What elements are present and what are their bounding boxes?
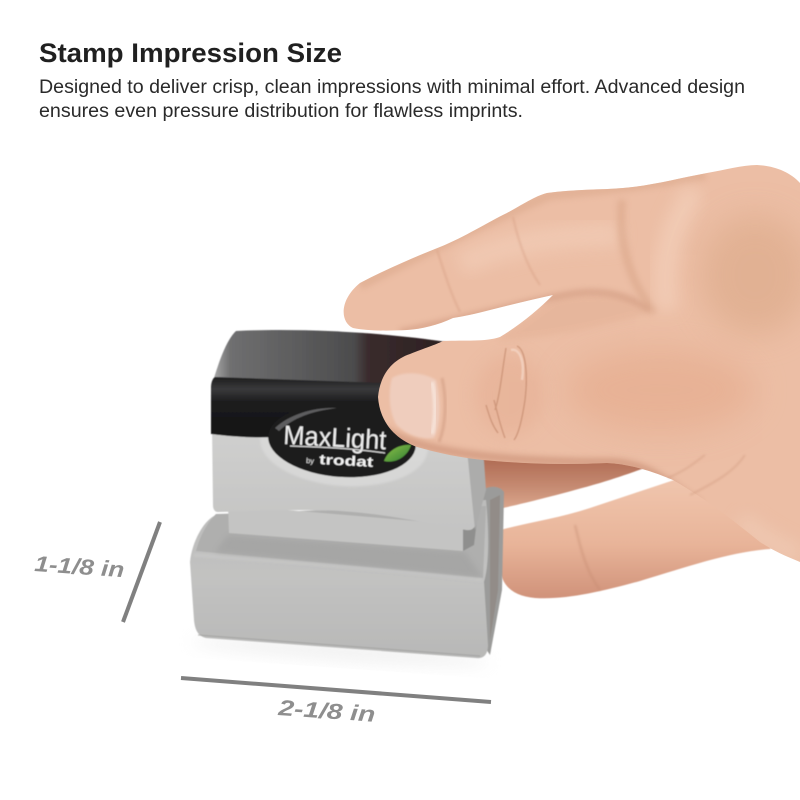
pinky finger <box>500 478 790 598</box>
base side face <box>480 487 504 655</box>
tan back of hand <box>700 215 800 335</box>
index finger highlight <box>460 235 620 265</box>
warm thumb knuckle area <box>565 348 755 432</box>
description text: ensures even pressure distribution for flawless imprints. <box>39 101 523 122</box>
side reflection <box>490 495 500 640</box>
description text: Designed to deliver crisp, clean impressions with minimal effort. Advanced design <box>39 77 745 98</box>
width dimension line <box>181 678 491 702</box>
black band <box>211 377 440 437</box>
right grip side <box>467 450 486 530</box>
wordmark swoosh <box>290 446 385 453</box>
stamp <box>190 330 504 658</box>
width label: 2-1/8 in <box>276 695 376 727</box>
index upper shading <box>360 175 705 285</box>
thumb knuckle highlight <box>511 350 523 380</box>
stamp floor shadow <box>190 634 490 670</box>
title: Stamp Impression Size <box>39 38 342 68</box>
upper grip body <box>212 425 476 530</box>
hand silhouette <box>344 165 800 562</box>
hand: fingers behind the stamp <box>470 450 790 598</box>
height dimension <box>34 522 160 622</box>
logo oval surround <box>257 396 431 492</box>
badge gloss <box>275 408 337 431</box>
logo brand: trodat <box>319 451 374 470</box>
middle finger tone <box>502 300 637 336</box>
base body <box>190 500 488 658</box>
logo byline: by <box>306 456 315 465</box>
pinky crease <box>575 525 600 590</box>
height dimension line <box>123 522 160 622</box>
width dimension <box>181 678 491 727</box>
index finger creases <box>437 217 540 312</box>
description text <box>39 77 745 122</box>
top face <box>214 330 447 390</box>
thumbnail <box>390 373 445 442</box>
height label: 1-1/8 in <box>34 551 125 582</box>
base bottom edge <box>198 635 480 656</box>
base shadow under neck <box>215 535 483 578</box>
index-palm junction shadow <box>621 200 655 313</box>
base top face <box>196 506 486 578</box>
ring finger <box>470 450 660 510</box>
index lower shadow <box>400 292 650 332</box>
knuckle highlight <box>665 190 695 310</box>
logo wordmark: MaxLight <box>283 420 388 455</box>
wrist highlight <box>748 524 791 554</box>
neck <box>228 505 463 551</box>
thumb joint tone <box>483 364 534 426</box>
palm creases <box>668 455 745 495</box>
thumb underside shadow <box>389 426 685 487</box>
thumb knuckle creases <box>486 346 526 440</box>
hand: index finger, palm and thumb <box>344 165 800 562</box>
base highlight <box>194 555 482 580</box>
logo badge <box>266 400 418 482</box>
leaf <box>384 445 411 462</box>
skin shading <box>360 175 800 555</box>
